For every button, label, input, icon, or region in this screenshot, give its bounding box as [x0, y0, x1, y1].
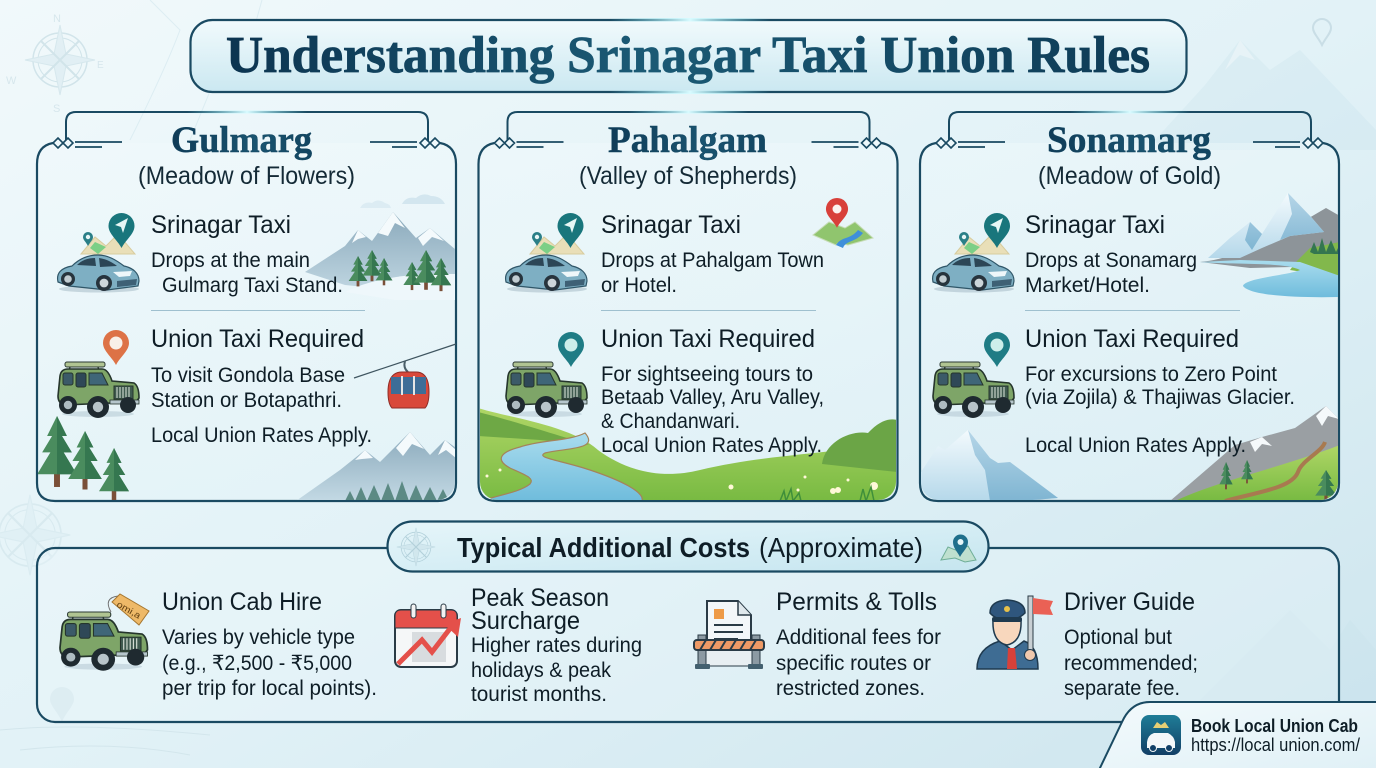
- background: W: [6, 75, 17, 87]
- icon: teal pin: [558, 332, 584, 367]
- icon: orange pin: [103, 330, 129, 365]
- icon: faint compass: [397, 528, 435, 566]
- item: Driver Guide: Driver Guide: [1064, 588, 1195, 616]
- item: Peak Season Surcharge: tourist months.: [471, 683, 607, 706]
- item: Permits and Tolls: Additional fees for: [776, 626, 941, 649]
- item: Peak Season Surcharge: Peak Season: [471, 584, 609, 612]
- text: Union Taxi Required: Station or Botapathri.: [151, 389, 342, 412]
- icon: teal navigation pin on map: [530, 213, 584, 254]
- item: Driver Guide: Optional but: [1064, 626, 1172, 649]
- heading: Pahalgam: Pahalgam: [608, 120, 767, 161]
- text: Union Taxi Required: [151, 325, 372, 447]
- panel: additional costs: [37, 522, 1339, 722]
- text: Union Taxi Required: Local Union Rates Apply.: [601, 434, 822, 457]
- icon: calendar with rising arrow: [395, 604, 461, 667]
- text: Union Taxi Required: [1025, 325, 1295, 457]
- item: Permits and Tolls: specific routes or: [776, 652, 931, 675]
- background: N: [53, 13, 61, 25]
- background: E: [97, 60, 104, 71]
- item: Union Cab Hire: per trip for local points).: [162, 677, 377, 700]
- heading: Sonamarg: Sonamarg: [1047, 120, 1211, 161]
- item: Peak Season Surcharge: Surcharge: [471, 607, 580, 635]
- icon: teal navigation pin on map: [81, 213, 135, 254]
- panel: Sonamarg: [920, 110, 1340, 501]
- item: Union Cab Hire: [60, 588, 377, 700]
- icon: map with pin: [941, 534, 976, 562]
- icon: jeep with price tag: [60, 594, 149, 671]
- subheading: (Meadow of Flowers): [138, 162, 355, 190]
- icon: gondola: [354, 344, 456, 408]
- item: Permits and Tolls: restricted zones.: [776, 677, 925, 700]
- text: Srinagar Taxi: Gulmarg Taxi Stand.: [162, 274, 343, 297]
- text: Union Taxi Required: Local Union Rates Apply.: [151, 424, 372, 447]
- scenery: Sonamarg peaks and lake: [921, 193, 1340, 501]
- scenery: Pahalgam meadow and river: [478, 408, 897, 501]
- item: Union Cab Hire: Varies by vehicle type: [162, 626, 355, 649]
- scenery: Gulmarg mountains and forest: [37, 194, 456, 501]
- subheading: (Valley of Shepherds): [579, 162, 797, 190]
- text: Union Taxi Required: Union Taxi Required: [151, 325, 364, 353]
- item: Peak Season Surcharge: [395, 584, 642, 706]
- icon: teal pin: [984, 332, 1010, 367]
- panel: Pahalgam: [478, 110, 898, 501]
- icon: booking app: [1141, 715, 1181, 755]
- text: Union Taxi Required: For sightseeing tours to: [601, 363, 813, 386]
- text: Srinagar Taxi: Drops at the main: [151, 249, 310, 272]
- icon: driver guide with flag: [977, 596, 1053, 669]
- icon: taxi car: [506, 255, 587, 292]
- text: Srinagar Taxi: Drops at Pahalgam Town: [601, 249, 824, 272]
- icon: teal navigation pin on map: [955, 213, 1010, 254]
- panel: Gulmarg: [37, 110, 456, 501]
- heading: Gulmarg: Gulmarg: [171, 120, 312, 161]
- icon: jeep with price tag: omi,a: [115, 599, 143, 621]
- title: Understanding Srinagar Taxi Union Rules: [226, 27, 1150, 84]
- text: Union Taxi Required: Betaab Valley, Aru Valley,: [601, 386, 824, 409]
- text: Srinagar Taxi: Srinagar Taxi: [601, 211, 741, 239]
- text: Union Taxi Required: Local Union Rates Apply.: [1025, 434, 1246, 457]
- text: Srinagar Taxi: Srinagar Taxi: [151, 211, 291, 239]
- item: Peak Season Surcharge: holidays & peak: [471, 659, 611, 682]
- item: Union Cab Hire: Union Cab Hire: [162, 588, 322, 616]
- text: Union Taxi Required: [601, 325, 824, 457]
- text: Union Taxi Required: For excursions to Zero Point: [1025, 363, 1277, 386]
- item: Union Cab Hire: (e.g., ₹2,500 - ₹5,000: [162, 652, 352, 675]
- heading pill: [388, 522, 988, 572]
- item: Permits and Tolls: [694, 588, 941, 700]
- item: Peak Season Surcharge: Higher rates during: [471, 634, 642, 657]
- booking tab: [1099, 702, 1376, 768]
- icon: permit document and barrier: [694, 601, 764, 669]
- item: Driver Guide: separate fee.: [1064, 677, 1180, 700]
- icon: union jeep: [58, 362, 139, 418]
- text: Srinagar Taxi: [1025, 211, 1197, 297]
- background: S: [53, 103, 60, 115]
- text: Union Taxi Required: To visit Gondola Base: [151, 364, 345, 387]
- item: Permits and Tolls: Permits & Tolls: [776, 588, 937, 616]
- subheading: (Meadow of Gold): [1038, 162, 1221, 190]
- text: Srinagar Taxi: or Hotel.: [601, 274, 677, 297]
- icon: union jeep: [933, 362, 1014, 418]
- text: Srinagar Taxi: Market/Hotel.: [1025, 274, 1150, 297]
- item: Driver Guide: recommended;: [1064, 652, 1198, 675]
- text: Srinagar Taxi: [151, 211, 343, 297]
- item: Driver Guide: [977, 588, 1198, 700]
- text: Srinagar Taxi: Srinagar Taxi: [1025, 211, 1165, 239]
- text: Union Taxi Required: & Chandanwari.: [601, 410, 740, 433]
- text: Srinagar Taxi: [601, 211, 824, 297]
- icon: union jeep: [506, 362, 587, 418]
- icon: taxi car: [933, 255, 1014, 292]
- text: Union Taxi Required: Union Taxi Required: [601, 325, 815, 353]
- text: Union Taxi Required: Union Taxi Required: [1025, 325, 1239, 353]
- heading pill: Typical Additional Costs: [457, 532, 750, 563]
- text: Srinagar Taxi: Drops at Sonamarg: [1025, 249, 1197, 272]
- text: Union Taxi Required: (via Zojila) & Thajiwas Glacier.: [1025, 386, 1295, 409]
- icon: taxi car: [58, 255, 139, 292]
- booking tab: https://local union.com/: [1191, 735, 1360, 755]
- icon: folded map with red pin: [813, 198, 873, 248]
- heading pill: (Approximate): [759, 532, 923, 563]
